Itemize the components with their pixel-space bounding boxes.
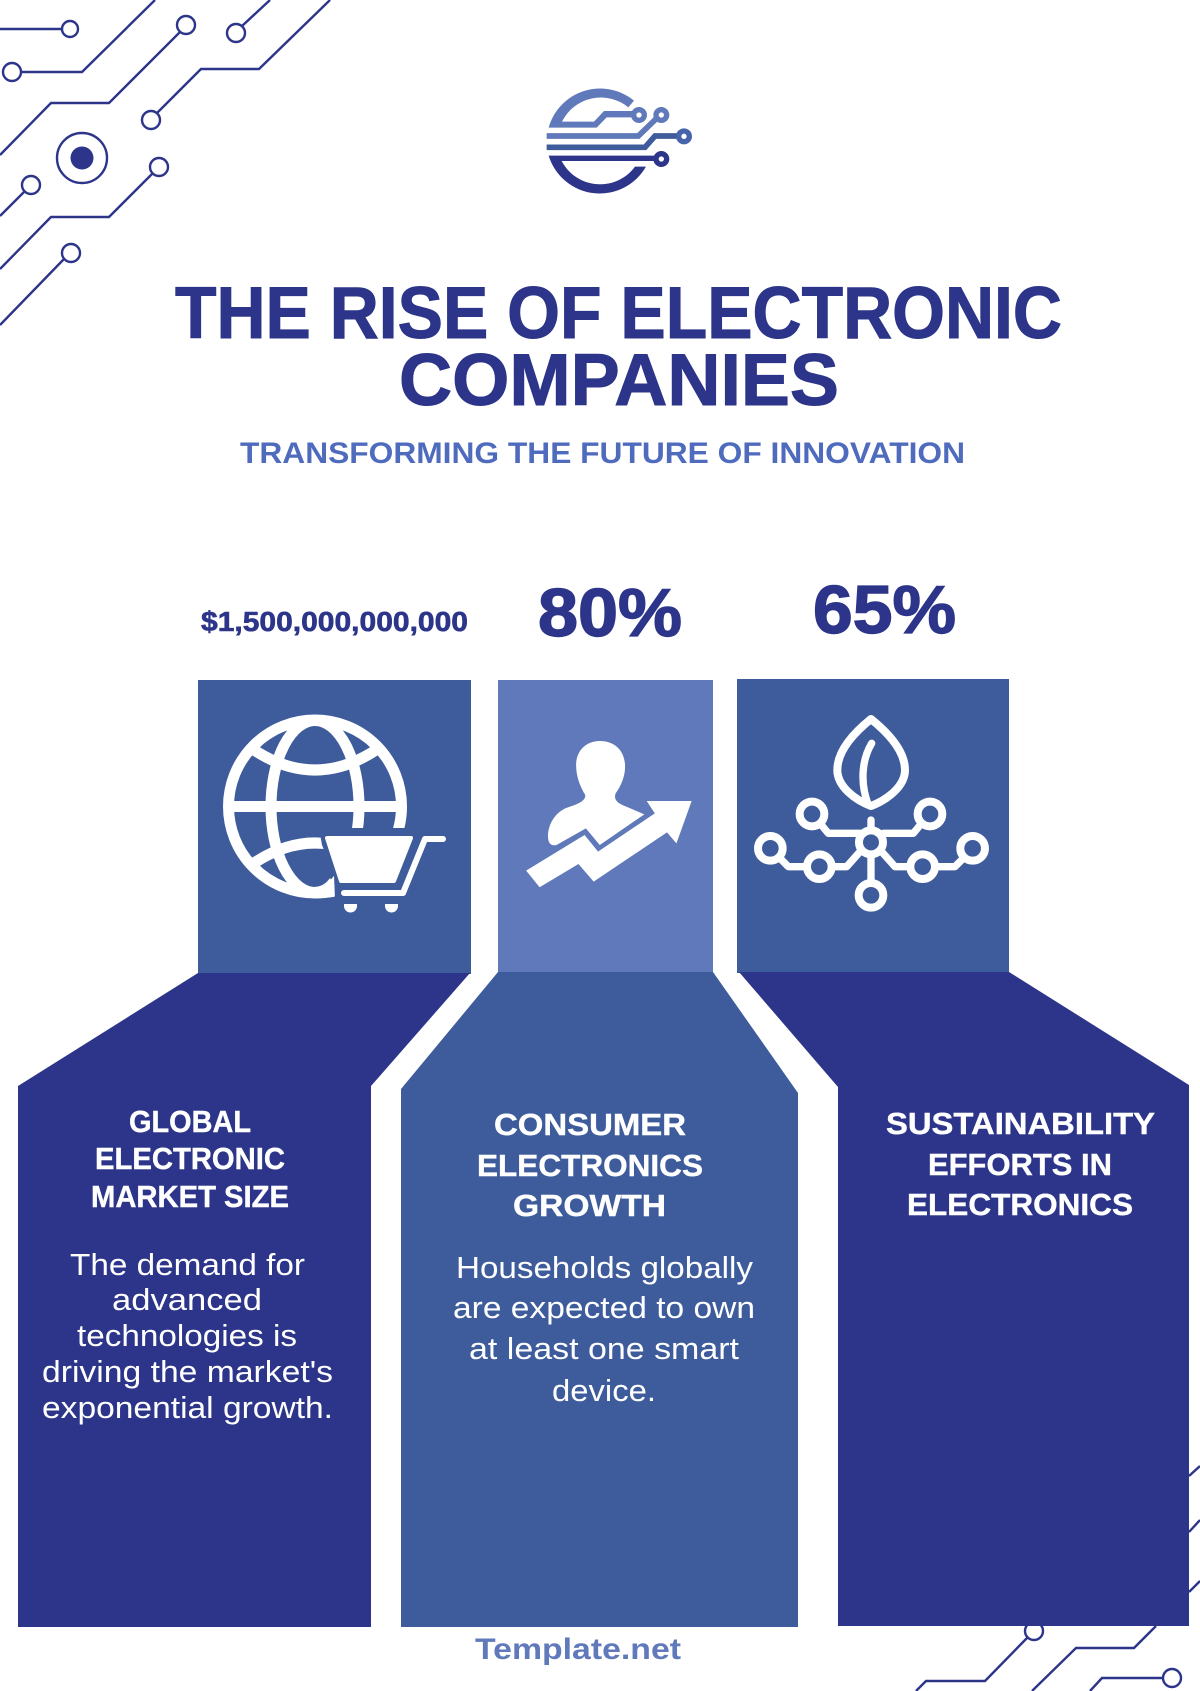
description: The demand for bbox=[70, 1247, 305, 1282]
heading bbox=[91, 1104, 289, 1214]
heading: CONSUMER bbox=[494, 1107, 686, 1142]
panel: global electronic market size bbox=[18, 680, 471, 1627]
heading: ELECTRONICS bbox=[907, 1187, 1133, 1222]
heading: ELECTRONIC bbox=[95, 1141, 285, 1176]
icon panel: globe with cart bbox=[198, 680, 471, 974]
icon panel: person with rising arrow bbox=[498, 680, 713, 973]
icon panel: leaf and circuit bbox=[737, 679, 1009, 973]
statistic: 65%: 65% bbox=[813, 572, 956, 648]
panel: consumer electronics growth bbox=[401, 680, 798, 1627]
panel body: mid blue bbox=[401, 972, 798, 1627]
heading: EFFORTS IN bbox=[928, 1147, 1112, 1182]
description bbox=[453, 1250, 755, 1408]
circuit decoration: top left bbox=[0, 0, 330, 325]
heading: ELECTRONICS bbox=[477, 1148, 703, 1183]
title: THE RISE OF ELECTRONIC bbox=[175, 273, 1062, 354]
icon: globe and shopping cart bbox=[228, 720, 443, 912]
description: advanced bbox=[112, 1282, 262, 1317]
title: COMPANIES bbox=[399, 340, 839, 421]
title bbox=[175, 273, 1062, 421]
description: exponential growth. bbox=[42, 1390, 333, 1425]
statistic: 80%: 80% bbox=[538, 575, 682, 651]
panel body: dark blue bbox=[18, 973, 470, 1627]
heading: MARKET SIZE bbox=[91, 1179, 289, 1214]
heading bbox=[886, 1106, 1155, 1222]
logo: circuit globe bbox=[547, 88, 689, 194]
panel: sustainability efforts in electronics bbox=[737, 679, 1189, 1626]
heading: GROWTH bbox=[513, 1188, 666, 1223]
description: are expected to own bbox=[453, 1290, 755, 1325]
panel body: dark blue bbox=[739, 972, 1189, 1626]
description: driving the market's bbox=[42, 1354, 333, 1389]
icon: person and arrow bbox=[526, 741, 692, 887]
heading: GLOBAL bbox=[129, 1104, 251, 1139]
footer: brand: Template.net bbox=[475, 1633, 681, 1666]
heading bbox=[477, 1107, 703, 1223]
subtitle: TRANSFORMING THE FUTURE OF INNOVATION bbox=[240, 437, 965, 470]
description: at least one smart bbox=[469, 1331, 739, 1366]
heading: SUSTAINABILITY bbox=[886, 1106, 1155, 1141]
description: technologies is bbox=[77, 1318, 297, 1353]
icon: leaf circuit bbox=[758, 719, 985, 908]
description: Households globally bbox=[456, 1250, 754, 1285]
description: device. bbox=[552, 1373, 656, 1408]
circuit decoration: bottom right bbox=[916, 1466, 1200, 1691]
description bbox=[42, 1247, 333, 1425]
statistic: market size: $1,500,000,000,000 bbox=[201, 606, 468, 637]
